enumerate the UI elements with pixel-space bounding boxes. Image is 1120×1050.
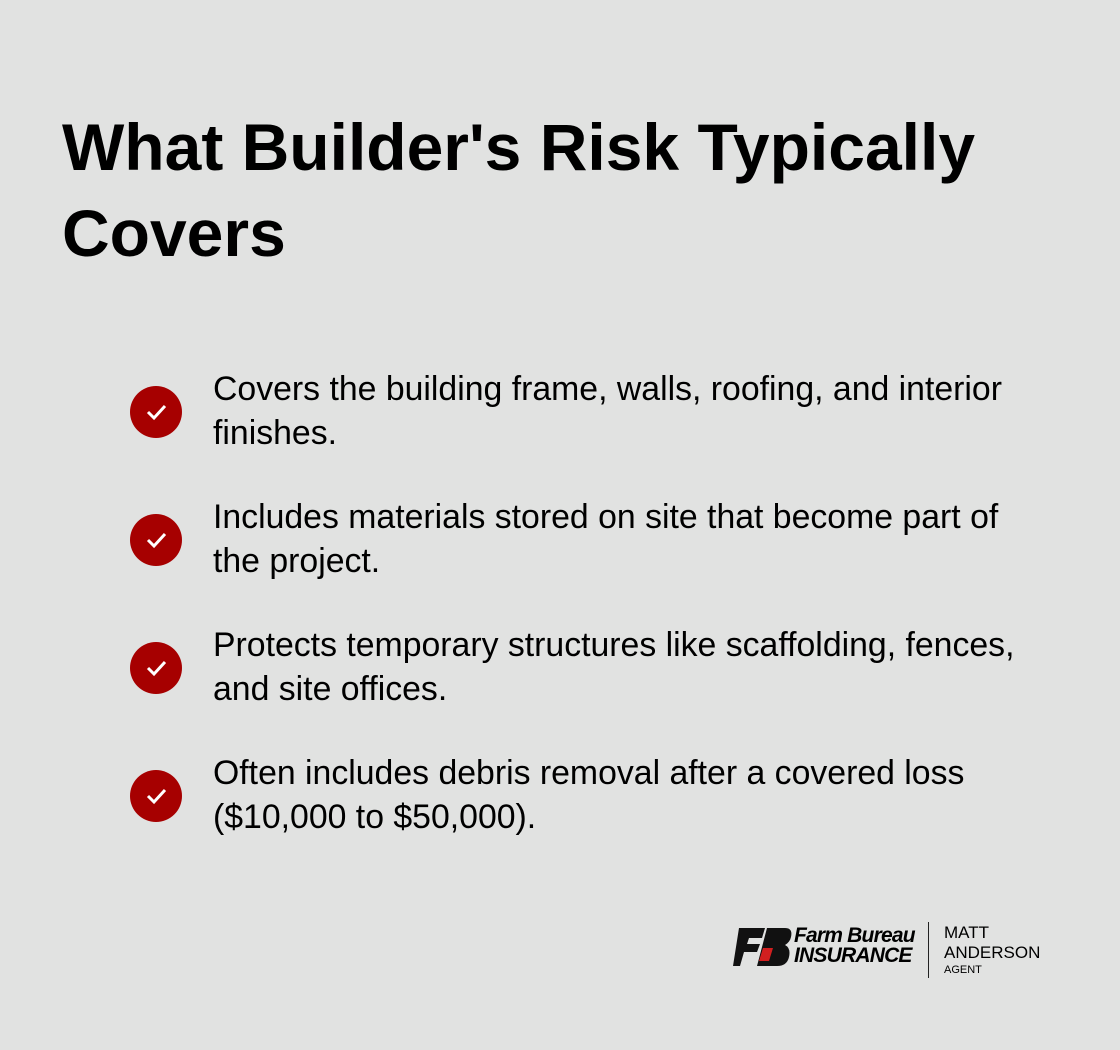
text 2: Includes materials stored on site that become part of the project. [213,498,998,580]
logo text: Farm Bureau [794,924,915,947]
item 1 [130,370,1002,452]
icon: FB mark [733,928,792,966]
icon: check [130,386,182,438]
text 1: Covers the building frame, walls, roofing, and interior finishes. [213,370,1002,452]
logo text [794,924,916,967]
logo [733,922,1040,978]
agent name: ANDERSON [944,943,1040,962]
text 3: Protects temporary structures like scaffolding, fences, and site offices. [213,626,1014,708]
title: What Builder's Risk Typically Covers [62,110,975,270]
agent name: AGENT [944,964,982,976]
agent name: MATT [944,923,989,942]
item 2 [130,498,998,580]
item 4 [130,754,964,836]
text 4: Often includes debris removal after a covered loss ($10,000 to $50,000). [213,754,964,836]
icon: check [130,514,182,566]
icon: check [130,770,182,822]
icon: check [130,642,182,694]
agent name [944,923,1040,976]
item 3 [130,626,1014,708]
logo text: INSURANCE [794,944,912,967]
